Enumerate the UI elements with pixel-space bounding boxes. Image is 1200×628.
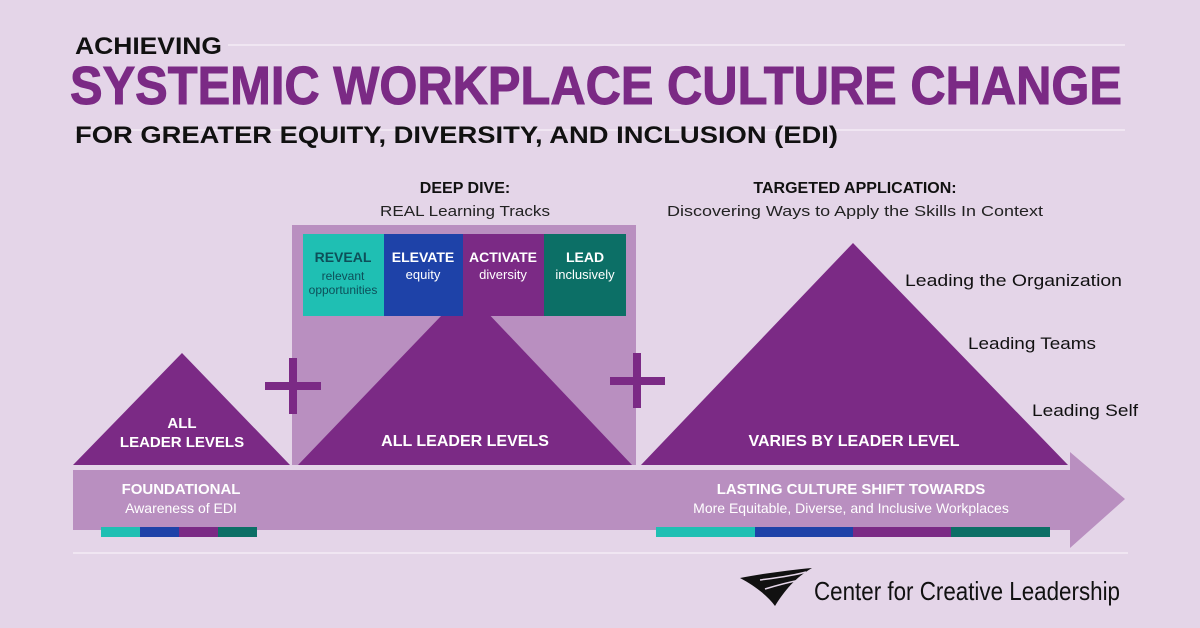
title <box>70 33 1122 149</box>
panel: deep dive: ALL LEADER LEVELS <box>381 433 549 450</box>
panel: deep dive <box>292 225 636 465</box>
color bar left <box>101 527 257 537</box>
panel: deep dive: opportunities <box>309 283 377 297</box>
heading: targeted application <box>667 180 1044 220</box>
panel: deep dive: ELEVATE <box>392 249 454 265</box>
panel: deep dive: ACTIVATE <box>469 249 537 265</box>
arrow: culture shift: More Equitable, Diverse, and Inclusive Workplaces <box>693 500 1009 516</box>
labels: leader levels: Leading Teams <box>968 334 1096 353</box>
heading: targeted application: Discovering Ways to Apply the Skills In Context <box>667 203 1044 220</box>
icon: plus 1 <box>265 358 321 414</box>
heading: deep dive: DEEP DIVE: <box>420 180 510 197</box>
logo: Center for Creative Leadership <box>814 576 1120 606</box>
title: SYSTEMIC WORKPLACE CULTURE CHANGE <box>70 56 1122 116</box>
triangle: foundational <box>73 353 290 465</box>
heading: targeted application: TARGETED APPLICATION: <box>753 180 957 197</box>
labels: leader levels: Leading Self <box>1032 401 1138 420</box>
arrow: culture shift: FOUNDATIONAL <box>122 481 240 498</box>
panel: deep dive: diversity <box>479 267 527 282</box>
heading: deep dive: REAL Learning Tracks <box>380 203 550 220</box>
labels: leader levels <box>905 271 1138 420</box>
triangle: foundational: ALL <box>167 415 197 432</box>
title: ACHIEVING <box>75 33 222 60</box>
arrow: culture shift <box>73 452 1125 548</box>
panel: deep dive: LEAD <box>566 249 604 265</box>
icon: plus 2 <box>610 353 665 408</box>
labels: leader levels: Leading the Organization <box>905 271 1122 290</box>
color bar right <box>656 527 1050 537</box>
panel: deep dive: relevant <box>322 269 365 283</box>
panel: deep dive: REVEAL <box>315 249 372 265</box>
triangle: targeted application: VARIES BY LEADER LEVEL <box>748 433 960 450</box>
triangle: targeted application <box>641 243 1068 465</box>
triangle: foundational: LEADER LEVELS <box>120 434 244 451</box>
title: FOR GREATER EQUITY, DIVERSITY, AND INCLUSION (EDI) <box>75 122 838 149</box>
panel: deep dive: inclusively <box>555 267 615 282</box>
arrow: culture shift: Awareness of EDI <box>125 500 237 516</box>
arrow: culture shift: LASTING CULTURE SHIFT TOWARDS <box>717 481 985 498</box>
logo <box>740 568 1120 606</box>
heading: deep dive <box>380 180 550 220</box>
panel: deep dive: equity <box>406 267 441 282</box>
